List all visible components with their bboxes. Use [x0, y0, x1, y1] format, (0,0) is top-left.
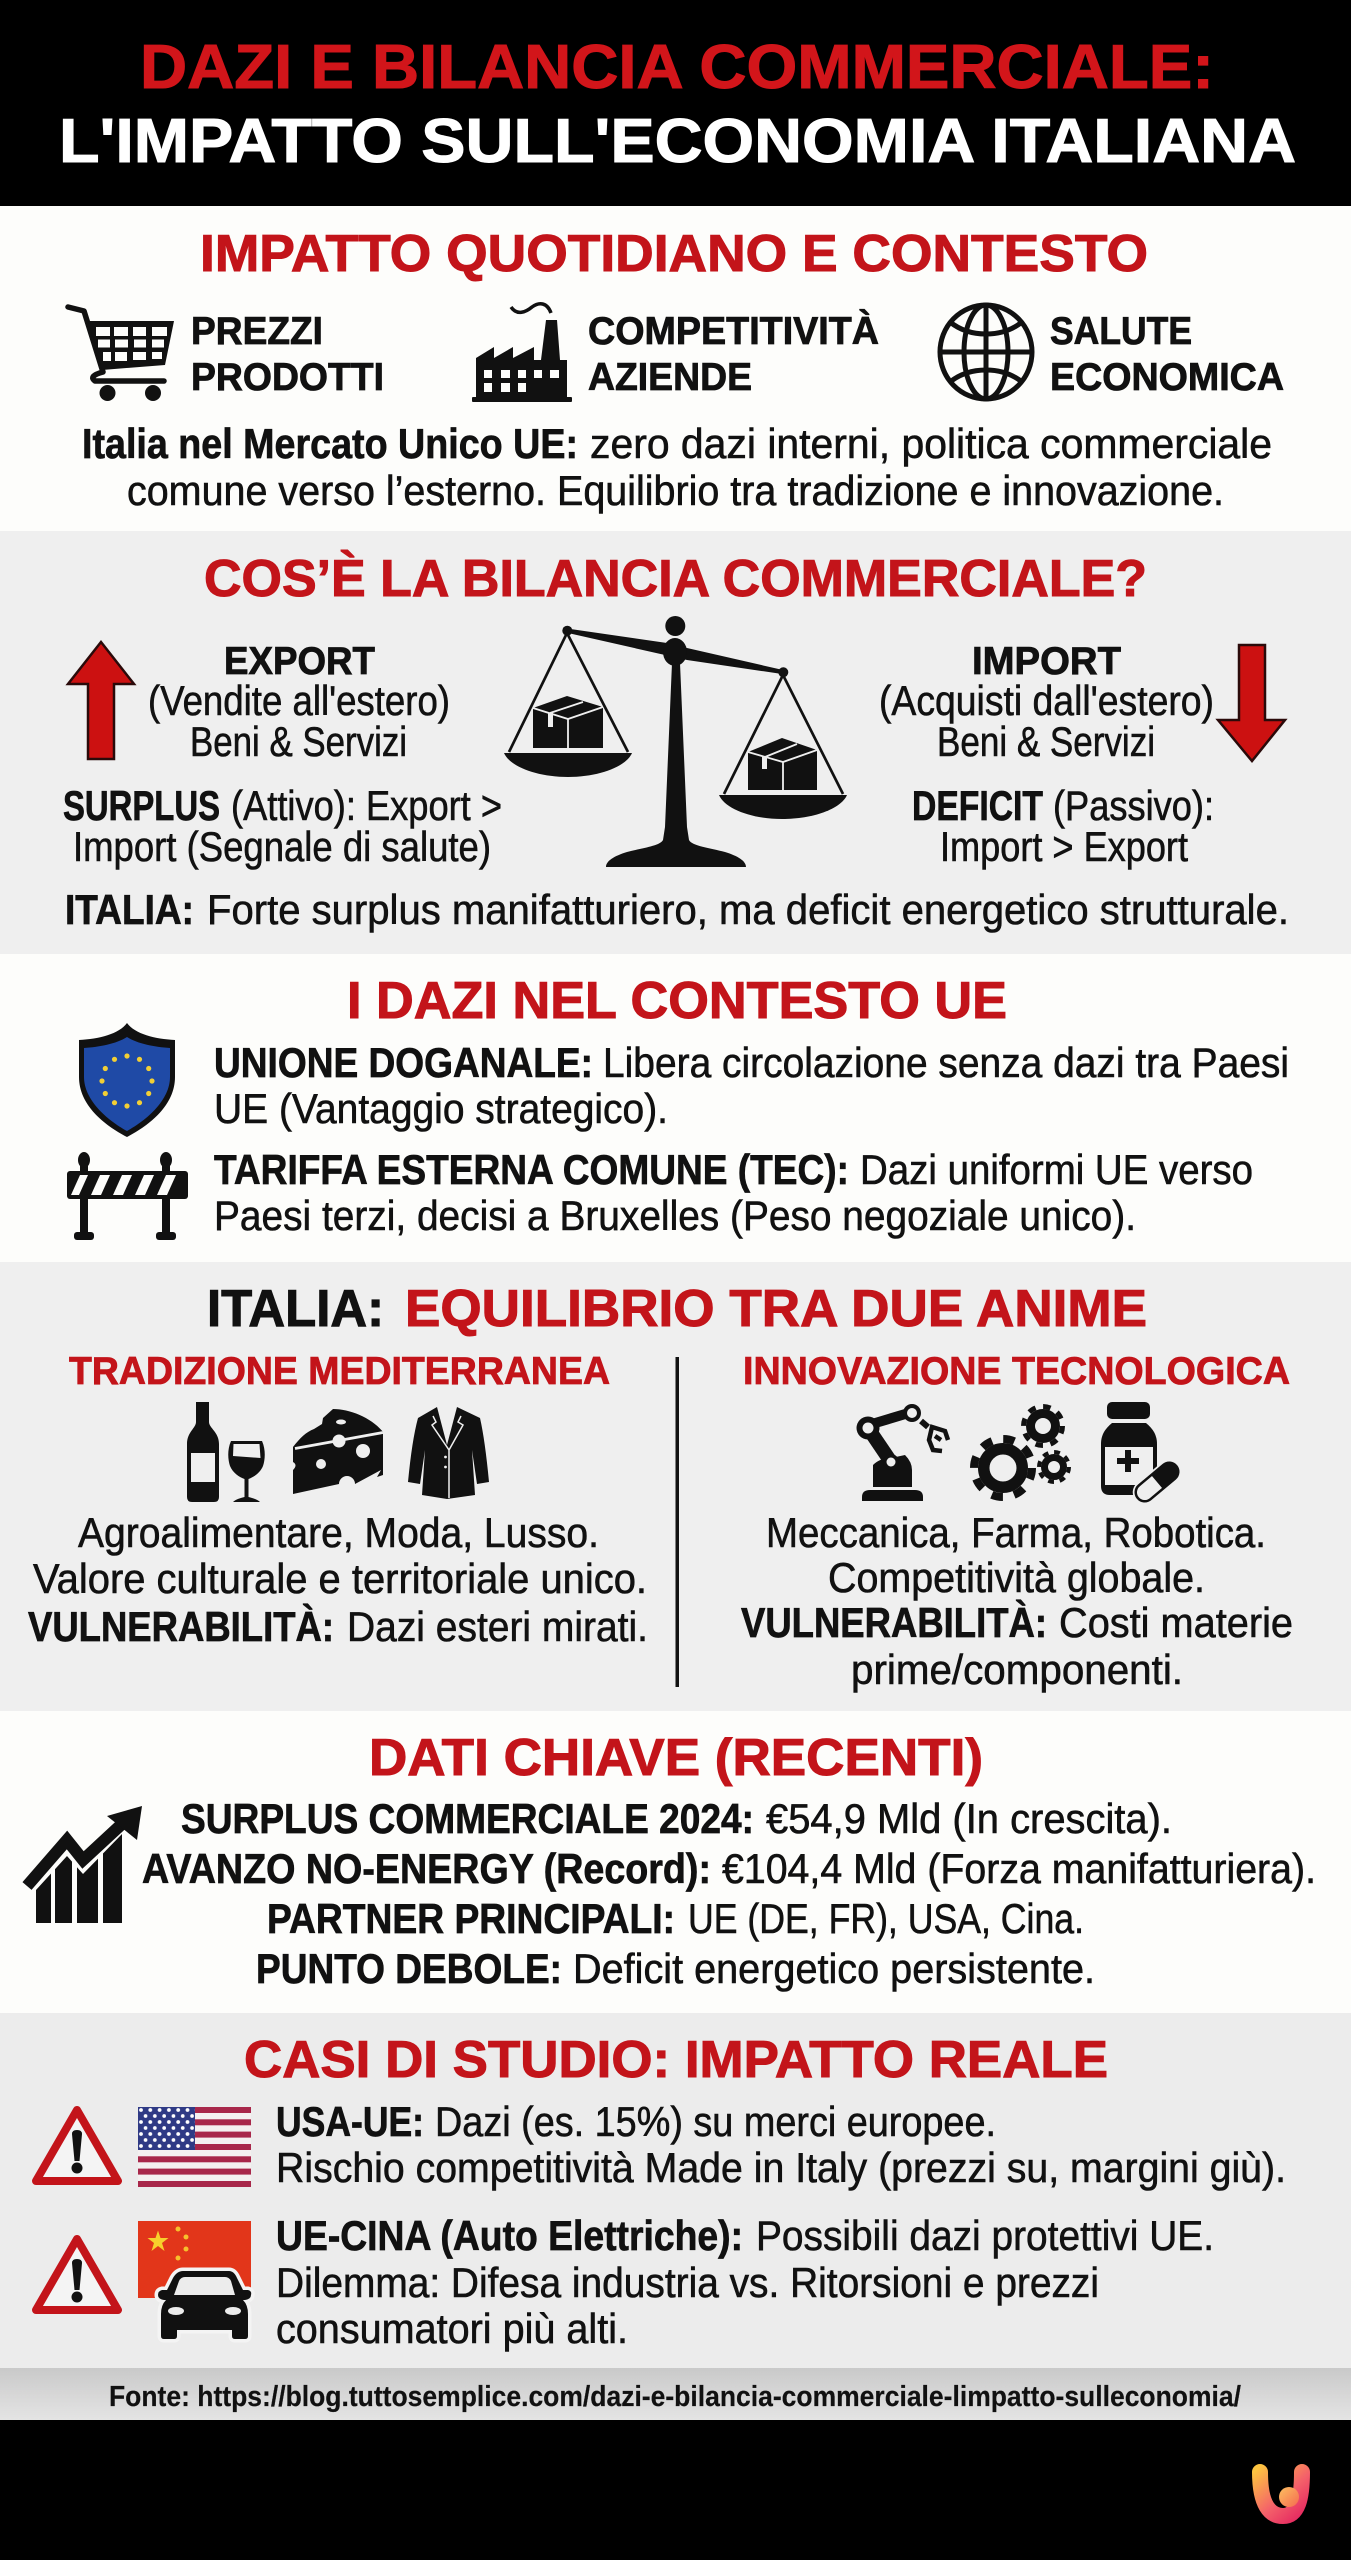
icon: eu shield	[79, 1023, 175, 1137]
text: innovazione: Meccanica, Farma, Robotica.	[766, 1509, 1266, 1556]
icon: warning triangle cina	[36, 2239, 118, 2310]
icon: medicine bottle and pill	[1101, 1402, 1186, 1509]
text: unione doganale: UE (Vantaggio strategico).	[214, 1085, 668, 1132]
subheading: tradizione mediterranea: TRADIZIONE MEDITERRANEA	[69, 1350, 610, 1393]
text: tradizione: Valore culturale e territoriale unico.	[33, 1555, 647, 1602]
text: partner principali	[267, 1895, 1084, 1942]
icon: shopping cart	[68, 307, 174, 401]
text: export: EXPORT	[224, 640, 375, 683]
label: salute economica: ECONOMICA	[1050, 356, 1284, 399]
icon: rising chart	[27, 1806, 142, 1924]
text: avanzo no-energy: AVANZO NO-ENERGY (Record):	[142, 1845, 711, 1892]
text: surplus commerciale 2024: €54,9 Mld (In crescita).	[766, 1795, 1172, 1842]
text: partner principali: PARTNER PRINCIPALI:	[267, 1895, 675, 1942]
text: partner principali: UE (DE, FR), USA, Cina.	[688, 1895, 1084, 1942]
text: innovazione: prime/componenti.	[851, 1646, 1183, 1693]
icon: globe	[940, 305, 1032, 399]
text: surplus commerciale 2024: SURPLUS COMMERCIALE 2024:	[181, 1795, 754, 1842]
text: punto debole: Deficit energetico persistente.	[573, 1945, 1095, 1992]
heading: COS’È LA BILANCIA COMMERCIALE?	[204, 550, 1147, 608]
text: punto debole: PUNTO DEBOLE:	[256, 1945, 562, 1992]
text: tradizione: Agroalimentare, Moda, Lusso.	[78, 1509, 599, 1556]
label: prezzi prodotti: PRODOTTI	[191, 356, 384, 399]
panel: impatto quotidiano e contesto	[0, 206, 1351, 531]
label: competitivita aziende: AZIENDE	[588, 356, 752, 399]
source footer	[0, 2368, 1351, 2420]
text: tradizione	[28, 1509, 648, 1650]
text: import	[879, 640, 1214, 765]
text: export: (Vendite all'estero)	[148, 677, 450, 724]
text: tariffa esterna comune: Paesi terzi, decisi a Bruxelles (Peso negoziale unico).	[214, 1192, 1136, 1239]
text: innovazione	[741, 1509, 1293, 1693]
text: surplus: SURPLUS	[63, 782, 220, 829]
text: import: (Acquisti dall'estero)	[879, 677, 1214, 724]
heading: CASI DI STUDIO: IMPATTO REALE	[244, 2031, 1108, 2089]
text: innovazione: VULNERABILITÀ:	[741, 1599, 1047, 1646]
panel: italia equilibrio tra due anime	[0, 1262, 1351, 1711]
text: surplus	[63, 782, 502, 870]
panel: cos'e la bilancia commerciale	[0, 531, 1351, 954]
icon: gears	[974, 1406, 1069, 1497]
text: deficit: Import > Export	[940, 823, 1188, 870]
text: italia nel mercato unico: Italia nel Mercato Unico UE:	[82, 420, 578, 467]
text: punto debole	[256, 1945, 1095, 1992]
text: usa-ue: USA-UE:	[276, 2098, 424, 2145]
text: ue-cina: UE-CINA (Auto Elettriche):	[276, 2212, 743, 2259]
icon: logo	[1260, 2472, 1302, 2516]
text: deficit: DEFICIT	[912, 782, 1043, 829]
text: avanzo no-energy	[142, 1845, 1316, 1892]
icon: robot arm	[856, 1404, 948, 1501]
text: avanzo no-energy: €104,4 Mld (Forza manifatturiera).	[722, 1845, 1316, 1892]
text: import: Beni & Servizi	[937, 718, 1155, 765]
title banner: L'IMPATTO SULL'ECONOMIA ITALIANA	[59, 107, 1296, 176]
icon: balance scale	[504, 616, 847, 867]
panel: casi di studio	[0, 2013, 1351, 2368]
text: import: IMPORT	[972, 640, 1121, 683]
text: surplus commerciale 2024	[181, 1795, 1172, 1842]
icon: china flag	[138, 2221, 251, 2298]
panel: i dazi nel contesto ue	[0, 954, 1351, 1262]
title banner: DAZI E BILANCIA COMMERCIALE:	[140, 33, 1214, 102]
label: prezzi prodotti: PREZZI	[191, 310, 323, 353]
text: usa-ue	[276, 2098, 1286, 2191]
heading: ITALIA:	[207, 1280, 384, 1338]
text: export	[148, 640, 450, 765]
icon: us flag	[138, 2107, 251, 2187]
text: tradizione: VULNERABILITÀ:	[28, 1603, 334, 1650]
text: surplus: Import (Segnale di salute)	[73, 823, 491, 870]
text: italia nel mercato unico: comune verso l’esterno. Equilibrio tra tradizione e innovazione.	[127, 467, 1224, 514]
label: competitivita aziende	[588, 309, 879, 399]
heading: I DAZI NEL CONTESTO UE	[347, 972, 1007, 1030]
icon: car	[158, 2271, 251, 2339]
text: italia surplus e deficit: ITALIA:	[65, 886, 194, 933]
text: unione doganale	[214, 1039, 1289, 1132]
label: competitivita aziende: COMPETITIVITÀ	[588, 309, 879, 353]
heading: DATI CHIAVE (RECENTI)	[369, 1729, 983, 1787]
text: ue-cina: Possibili dazi protettivi UE.	[756, 2212, 1214, 2259]
icon: road barrier	[67, 1152, 188, 1240]
icon: factory	[472, 304, 572, 402]
text: unione doganale: UNIONE DOGANALE:	[214, 1039, 593, 1086]
subheading: innovazione tecnologica: INNOVAZIONE TECNOLOGICA	[743, 1350, 1290, 1393]
label: salute economica: SALUTE	[1050, 310, 1192, 353]
heading: IMPATTO QUOTIDIANO E CONTESTO	[200, 225, 1148, 283]
text: export: Beni & Servizi	[190, 718, 407, 765]
label: prezzi prodotti	[191, 310, 384, 399]
icon: blazer jacket	[408, 1407, 489, 1499]
icon: warning triangle usa	[36, 2110, 118, 2181]
text: unione doganale: Libera circolazione senza dazi tra Paesi	[603, 1039, 1289, 1086]
text: innovazione: Competitività globale.	[828, 1554, 1205, 1601]
text: tariffa esterna comune	[214, 1146, 1253, 1239]
text: italia nel mercato unico	[82, 420, 1272, 514]
text: ue-cina: consumatori più alti.	[276, 2305, 628, 2352]
text: ue-cina: Dilemma: Difesa industria vs. Ritorsioni e prezzi	[276, 2259, 1099, 2306]
icon: wine bottle and glass	[187, 1402, 265, 1502]
heading: EQUILIBRIO TRA DUE ANIME	[405, 1280, 1147, 1338]
source footer: Fonte: https://blog.tuttosemplice.com/dazi-e-bilancia-commerciale-limpatto-sulleconomia/	[109, 2381, 1241, 2413]
text: ue-cina	[276, 2212, 1214, 2352]
text: usa-ue: Rischio competitività Made in Italy (prezzi su, margini giù).	[276, 2144, 1286, 2191]
title banner	[0, 0, 1351, 206]
text: deficit: (Passivo):	[1053, 782, 1214, 829]
text: tariffa esterna comune: TARIFFA ESTERNA COMUNE (TEC):	[214, 1146, 849, 1193]
panel: dati chiave	[0, 1711, 1351, 2013]
text: surplus: (Attivo): Export >	[231, 782, 502, 829]
text: usa-ue: Dazi (es. 15%) su merci europee.	[435, 2098, 996, 2145]
icon: cheese wedge	[293, 1409, 383, 1494]
text: innovazione: Costi materie	[1059, 1599, 1293, 1646]
arrow: export up	[68, 642, 134, 759]
text: tradizione: Dazi esteri mirati.	[347, 1603, 648, 1650]
label: salute economica	[1050, 310, 1284, 399]
arrow: import down	[1218, 645, 1285, 761]
text: italia surplus e deficit: Forte surplus manifatturiero, ma deficit energetico strutturale.	[207, 886, 1289, 933]
text: deficit	[912, 782, 1214, 870]
text: tariffa esterna comune: Dazi uniformi UE verso	[860, 1146, 1253, 1193]
text: italia nel mercato unico: zero dazi interni, politica commerciale	[590, 420, 1272, 467]
